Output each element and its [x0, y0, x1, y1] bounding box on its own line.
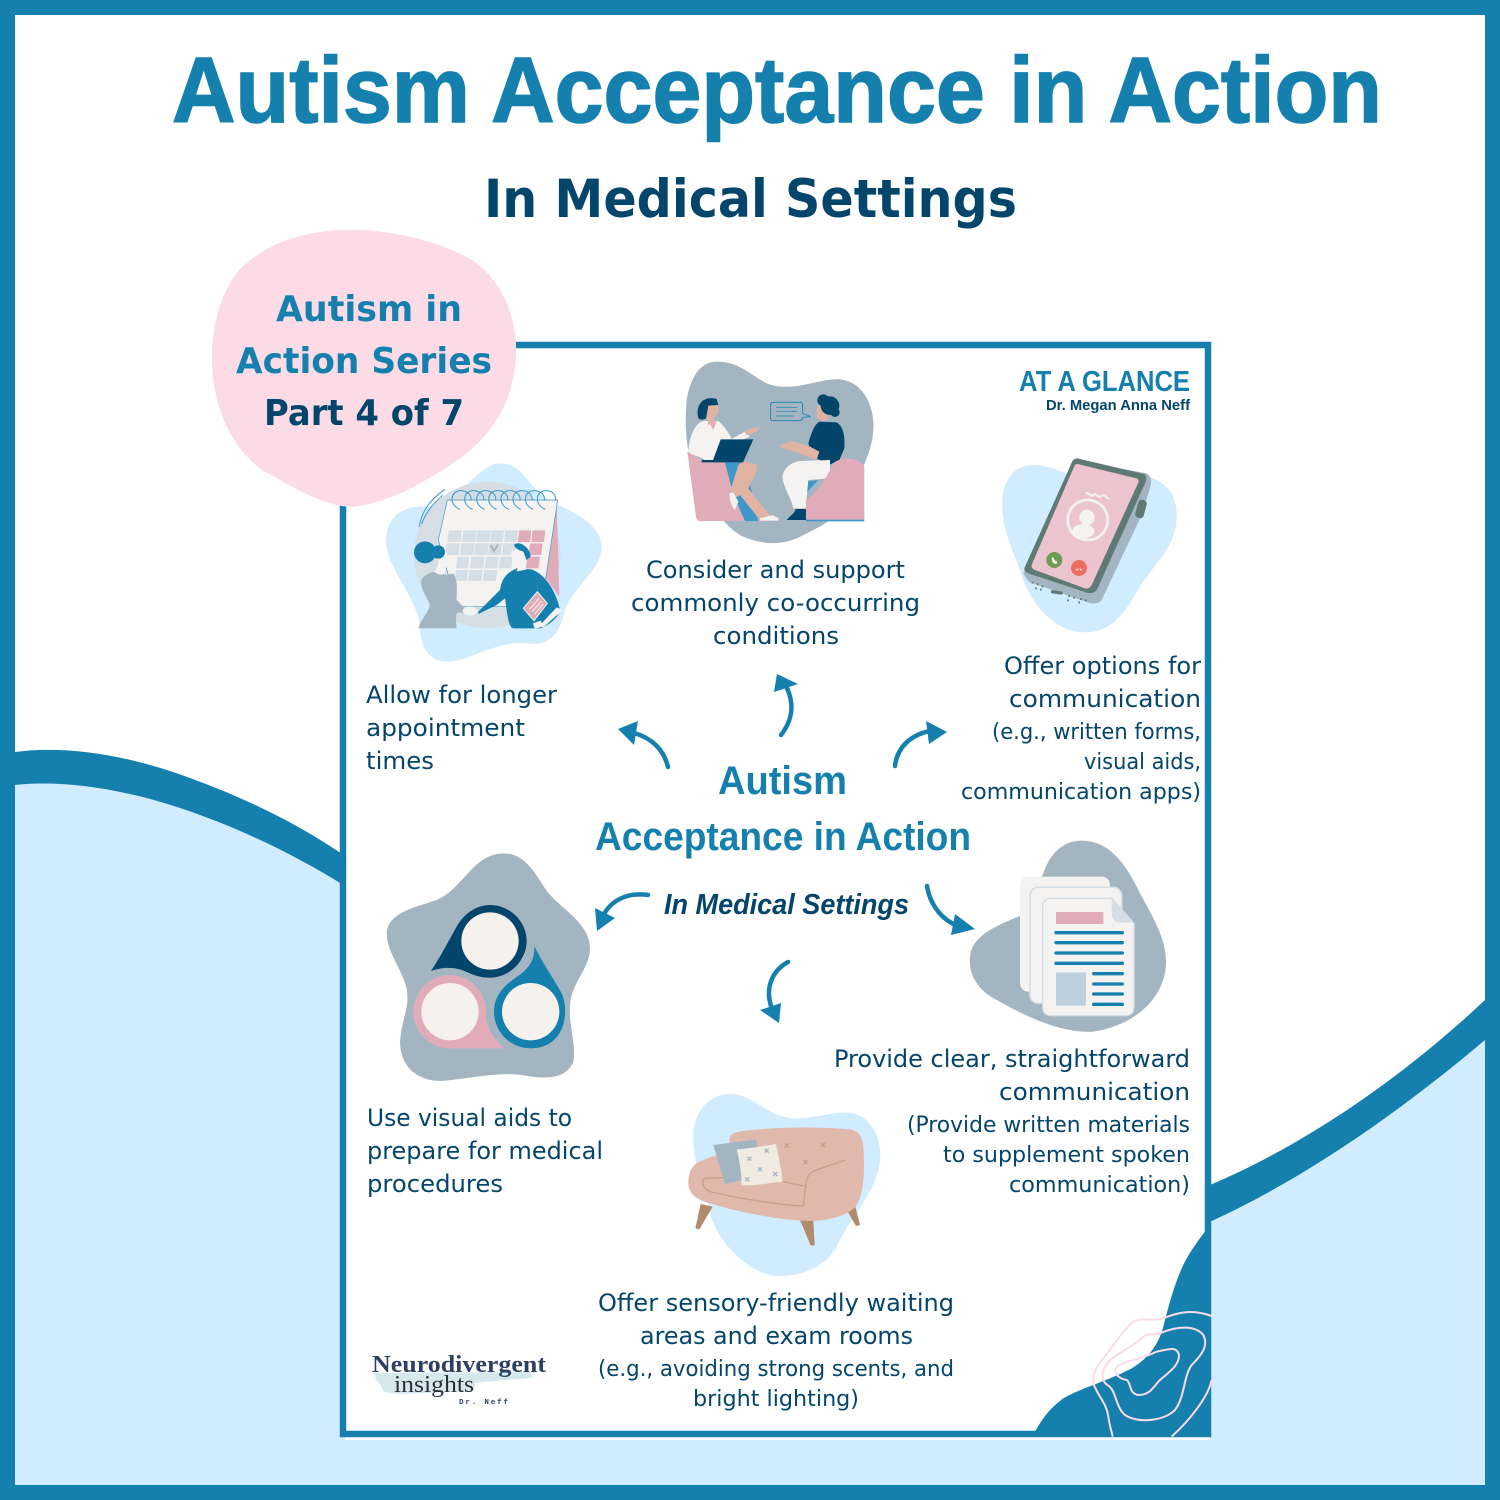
text: communication options: [961, 652, 1201, 805]
icon: visual aids shapes: [387, 853, 590, 1081]
arrow: lower left: [595, 894, 648, 931]
text: longer appointments: [366, 681, 557, 775]
text: longer appointments: times: [366, 747, 434, 775]
text: visual aids: Use visual aids to: [367, 1104, 572, 1132]
icon: calendar handshake illustration: [386, 463, 602, 662]
text: co-occurring conditions: conditions: [713, 622, 839, 650]
text: communication options: communication: [1009, 685, 1201, 713]
icon: sofa: [688, 1094, 880, 1276]
text: clear communication: communication: [999, 1078, 1190, 1106]
text: sensory-friendly rooms: bright lighting): [693, 1387, 859, 1412]
icon: phone call: [1002, 458, 1177, 632]
text: sensory-friendly rooms: Offer sensory-friendly waiting: [598, 1289, 954, 1317]
text: sensory-friendly rooms: (e.g., avoiding strong scents, and: [598, 1357, 954, 1382]
text: communication options: communication apps): [961, 780, 1201, 805]
text: communication options: (e.g., written forms,: [992, 720, 1201, 745]
text: visual aids: prepare for medical: [367, 1137, 603, 1165]
heading: at a glance: Dr. Megan Anna Neff: [1046, 397, 1191, 414]
text: longer appointments: appointment: [366, 714, 525, 742]
center heading: [595, 759, 971, 921]
text: visual aids: procedures: [367, 1170, 503, 1198]
center heading: In Medical Settings: [664, 889, 909, 921]
text: co-occurring conditions: [631, 556, 920, 650]
text: clear communication: (Provide written materials: [907, 1113, 1190, 1138]
text: sensory-friendly rooms: [598, 1289, 954, 1412]
logo: neurodivergent insights: [372, 1352, 546, 1407]
center heading: Acceptance in Action: [595, 815, 971, 859]
panel: at a glance sheet: [343, 345, 1208, 1434]
text: communication options: visual aids,: [1084, 750, 1201, 775]
badge: series part: [212, 230, 516, 507]
corner decoration: [1035, 1232, 1212, 1437]
text: clear communication: Provide clear, straightforward: [834, 1045, 1190, 1073]
heading: at a glance: [1019, 366, 1191, 414]
text: sensory-friendly rooms: areas and exam rooms: [640, 1322, 913, 1350]
title: Autism Acceptance in Action: [172, 38, 1382, 142]
logo: neurodivergent insights: insights: [394, 1372, 474, 1398]
arrow: upper right: [895, 721, 947, 766]
badge: series part: Autism in: [276, 289, 462, 330]
text: clear communication: to supplement spoken: [943, 1143, 1190, 1168]
icon: documents: [970, 841, 1166, 1032]
arrow: down: [760, 962, 788, 1023]
text: co-occurring conditions: commonly co-occurring: [631, 589, 920, 617]
arrow: upper left: [618, 721, 668, 767]
heading: at a glance: AT A GLANCE: [1019, 366, 1190, 398]
text: clear communication: communication): [1009, 1173, 1190, 1198]
text: longer appointments: Allow for longer: [366, 681, 557, 709]
arrow: up: [774, 674, 798, 735]
text: visual aids: [367, 1104, 603, 1198]
logo: neurodivergent insights: Dr. Neff: [459, 1399, 508, 1407]
text: communication options: Offer options for: [1004, 652, 1201, 680]
icon: doctor and patient conversation: [686, 362, 873, 543]
subtitle: In Medical Settings: [484, 169, 1017, 230]
arrows: [595, 674, 975, 1023]
text: co-occurring conditions: Consider and support: [646, 556, 905, 584]
badge: series part: Part 4 of 7: [264, 393, 464, 434]
center heading: Autism: [718, 759, 847, 803]
text: clear communication: [834, 1045, 1190, 1198]
arrow: lower right: [927, 886, 975, 935]
badge: series part: Action Series: [236, 341, 492, 382]
logo: neurodivergent insights: Neurodivergent: [372, 1352, 546, 1378]
